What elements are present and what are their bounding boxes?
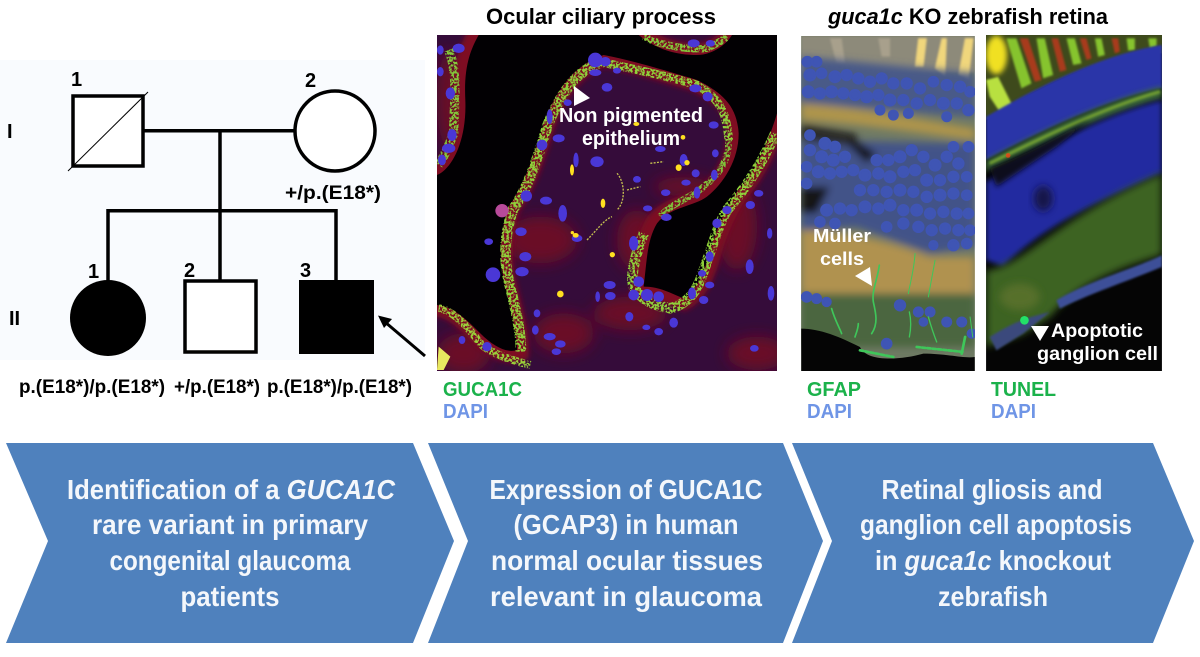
arrowhead: Müller cells: [855, 267, 872, 286]
label: non pigmented epithelium: epithelium: [582, 127, 680, 150]
genotype labels: p.(E18*)/p.(E18*): [267, 377, 412, 398]
chevron: expression: (GCAP3) in human: [514, 509, 738, 540]
nuclei: [437, 39, 774, 355]
legend: tunel dapi: [991, 379, 1056, 423]
legend: gfap dapi: DAPI: [807, 401, 852, 423]
outer nuclear layer: [986, 45, 1162, 160]
pedigree panel: [0, 60, 425, 398]
label: apoptotic ganglion cell: ganglion cell: [1037, 344, 1158, 365]
chevron: gliosis: in guca1c knockout: [875, 545, 1111, 576]
chevron: expression: [428, 443, 823, 643]
tunel-positive cell: [1020, 316, 1029, 325]
ganglion cell layer: [1056, 255, 1162, 309]
legend: gfap dapi: GFAP: [807, 379, 861, 401]
chevron: identification: rare variant in primary: [92, 509, 369, 540]
generation I couple: +/p.(E18*): [285, 183, 381, 204]
tissue red zones: [437, 50, 787, 373]
label: non pigmented epithelium: Non pigmented: [559, 104, 703, 127]
inner nuclear layer: [986, 100, 1162, 267]
retina nuclei: [802, 57, 976, 348]
chevron: identification: congenital glaucoma: [110, 545, 351, 576]
generation II siblings: [70, 260, 374, 356]
inner plexiform layer: [986, 173, 1162, 347]
heading: zebrafish retina: guca1c KO zebrafish retina: [827, 4, 1109, 29]
chevron: identification: Identification of a GUCA1C: [67, 474, 396, 505]
arrowhead: non pigmented epithelium: [574, 86, 590, 106]
chevron: gliosis: zebrafish: [938, 581, 1048, 612]
black lumen: [437, 35, 777, 351]
generation I couple: 1: [71, 69, 82, 91]
label: apoptotic ganglion cell: [1037, 321, 1158, 365]
bright yellow puncta: [437, 122, 690, 370]
legend: guca1c dapi: DAPI: [443, 401, 488, 423]
chevron: gliosis: [792, 443, 1194, 643]
generation II siblings: 2: [184, 260, 195, 282]
legend: tunel dapi: DAPI: [991, 401, 1036, 423]
black vitreous: [801, 329, 975, 371]
micrograph: ocular ciliary process: [437, 35, 777, 371]
legend: tunel dapi: TUNEL: [991, 379, 1056, 401]
vessel fibres: [587, 162, 664, 240]
label: Müller cells: Müller: [813, 226, 871, 246]
label: non pigmented epithelium: [559, 104, 703, 150]
generation labels: [7, 121, 20, 330]
proband arrow: [378, 316, 425, 356]
chevron: identification: patients: [180, 581, 280, 612]
photoreceptor stripes: [986, 35, 1162, 120]
nuclear layer haze and tan bands: [801, 57, 975, 347]
heading: ocular ciliary process: Ocular ciliary process: [486, 4, 716, 29]
label: apoptotic ganglion cell: Apoptotic: [1051, 321, 1143, 342]
green epithelium speckle: [439, 37, 775, 365]
generation labels: II: [9, 308, 20, 330]
genotype labels: [19, 377, 412, 398]
micrograph: GFAP retina: [801, 36, 975, 371]
chevron: gliosis: Retinal gliosis and: [882, 474, 1102, 505]
micrograph: TUNEL retina: [986, 35, 1162, 371]
photoreceptor stripes: [801, 36, 975, 80]
legend: guca1c dapi: [443, 379, 522, 423]
chevron: expression: Expression of GUCA1C: [490, 474, 763, 505]
generation I couple: 2: [305, 70, 316, 92]
chevron: gliosis: ganglion cell apoptosis: [860, 509, 1132, 540]
genotype labels: p.(E18*)/p.(E18*): [19, 377, 165, 398]
outer plexiform layer: [986, 87, 1162, 172]
generation II siblings: 3: [300, 260, 311, 282]
chevron: identification: [6, 443, 454, 643]
green glial fibres: [832, 254, 973, 357]
label: Müller cells: cells: [820, 249, 864, 269]
legend: gfap dapi: [807, 379, 861, 423]
descent lines: [108, 131, 336, 281]
chevron: expression: relevant in glaucoma: [490, 581, 763, 612]
generation labels: I: [7, 121, 13, 143]
generation I couple: [68, 69, 381, 204]
label: Müller cells: [813, 226, 871, 269]
legend: guca1c dapi: GUCA1C: [443, 379, 522, 401]
rounded cell pink: [495, 204, 509, 217]
generation II siblings: 1: [88, 261, 99, 283]
chevron: expression: normal ocular tissues: [491, 545, 763, 576]
arrowhead: apoptotic ganglion cell: [1031, 326, 1049, 341]
genotype labels: +/p.(E18*): [174, 377, 260, 398]
